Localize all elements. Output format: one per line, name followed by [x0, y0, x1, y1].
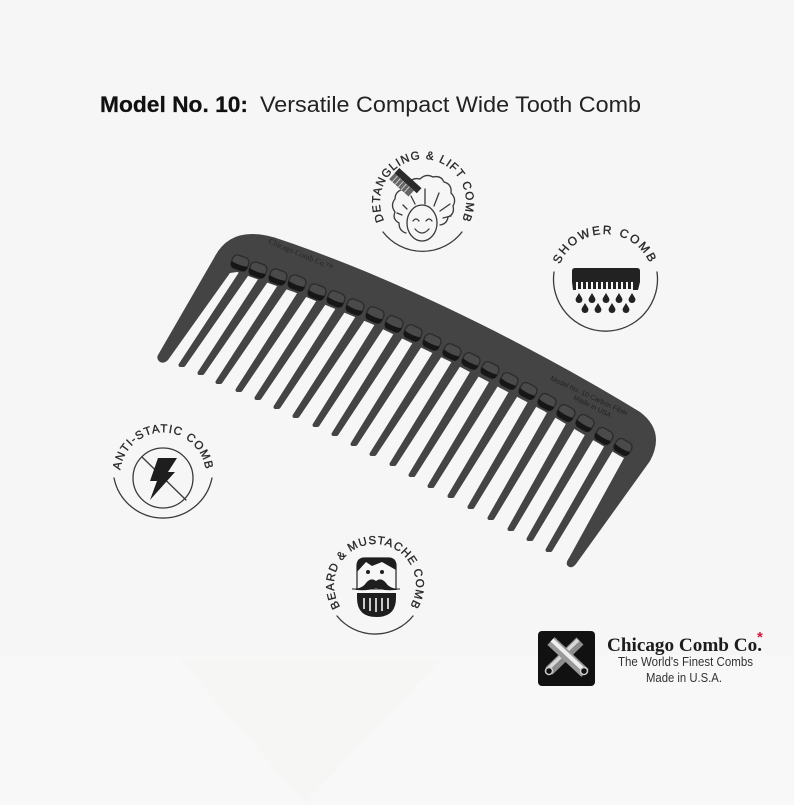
badge arc — [114, 478, 212, 518]
comb model engraving: Model No. 10 Carbon Fiber — [549, 375, 629, 418]
title — [100, 92, 641, 117]
title: Versatile Compact Wide Tooth Comb — [260, 92, 641, 117]
badge: beard and mustache comb — [326, 536, 424, 635]
title: Model No. 10: — [100, 92, 248, 117]
comb body — [157, 234, 656, 567]
comb model engraving: Made in USA — [572, 395, 612, 420]
comb slots — [230, 254, 634, 457]
badge circle arc — [554, 272, 658, 331]
badge label: SHOWER COMB — [553, 226, 656, 264]
wide tooth comb — [157, 234, 656, 567]
badge arc — [337, 616, 413, 634]
comb brand engraving: Chicago Comb Co.™ — [267, 237, 335, 272]
badge label: BEARD & MUSTACHE COMB — [326, 536, 424, 610]
logo wordmark: Chicago Comb Co. — [607, 635, 762, 656]
icon: small comb — [389, 168, 422, 199]
badge arc — [383, 232, 462, 251]
badge label: DETANGLING & LIFT COMB — [372, 151, 474, 223]
logo asterisk: * — [757, 629, 763, 646]
icon: bearded face — [352, 558, 400, 617]
logo tagline: The World's Finest Combs — [618, 655, 753, 669]
icon: comb — [572, 268, 640, 290]
icon: prohibited circle — [133, 448, 193, 508]
badge: shower comb — [552, 226, 658, 332]
icon: water drops — [576, 293, 635, 313]
badge label: ANTI-STATIC COMB — [112, 424, 213, 470]
badge: anti-static comb — [112, 424, 213, 519]
comb teeth — [180, 266, 616, 550]
icon: lightning bolt — [150, 458, 177, 500]
logo mark: crossed combs — [538, 631, 595, 686]
icon: hair and smiling face — [392, 175, 455, 241]
brand logo — [538, 629, 763, 686]
logo origin line: Made in U.S.A. — [646, 671, 722, 685]
badge: detangling and lift comb — [372, 151, 474, 252]
